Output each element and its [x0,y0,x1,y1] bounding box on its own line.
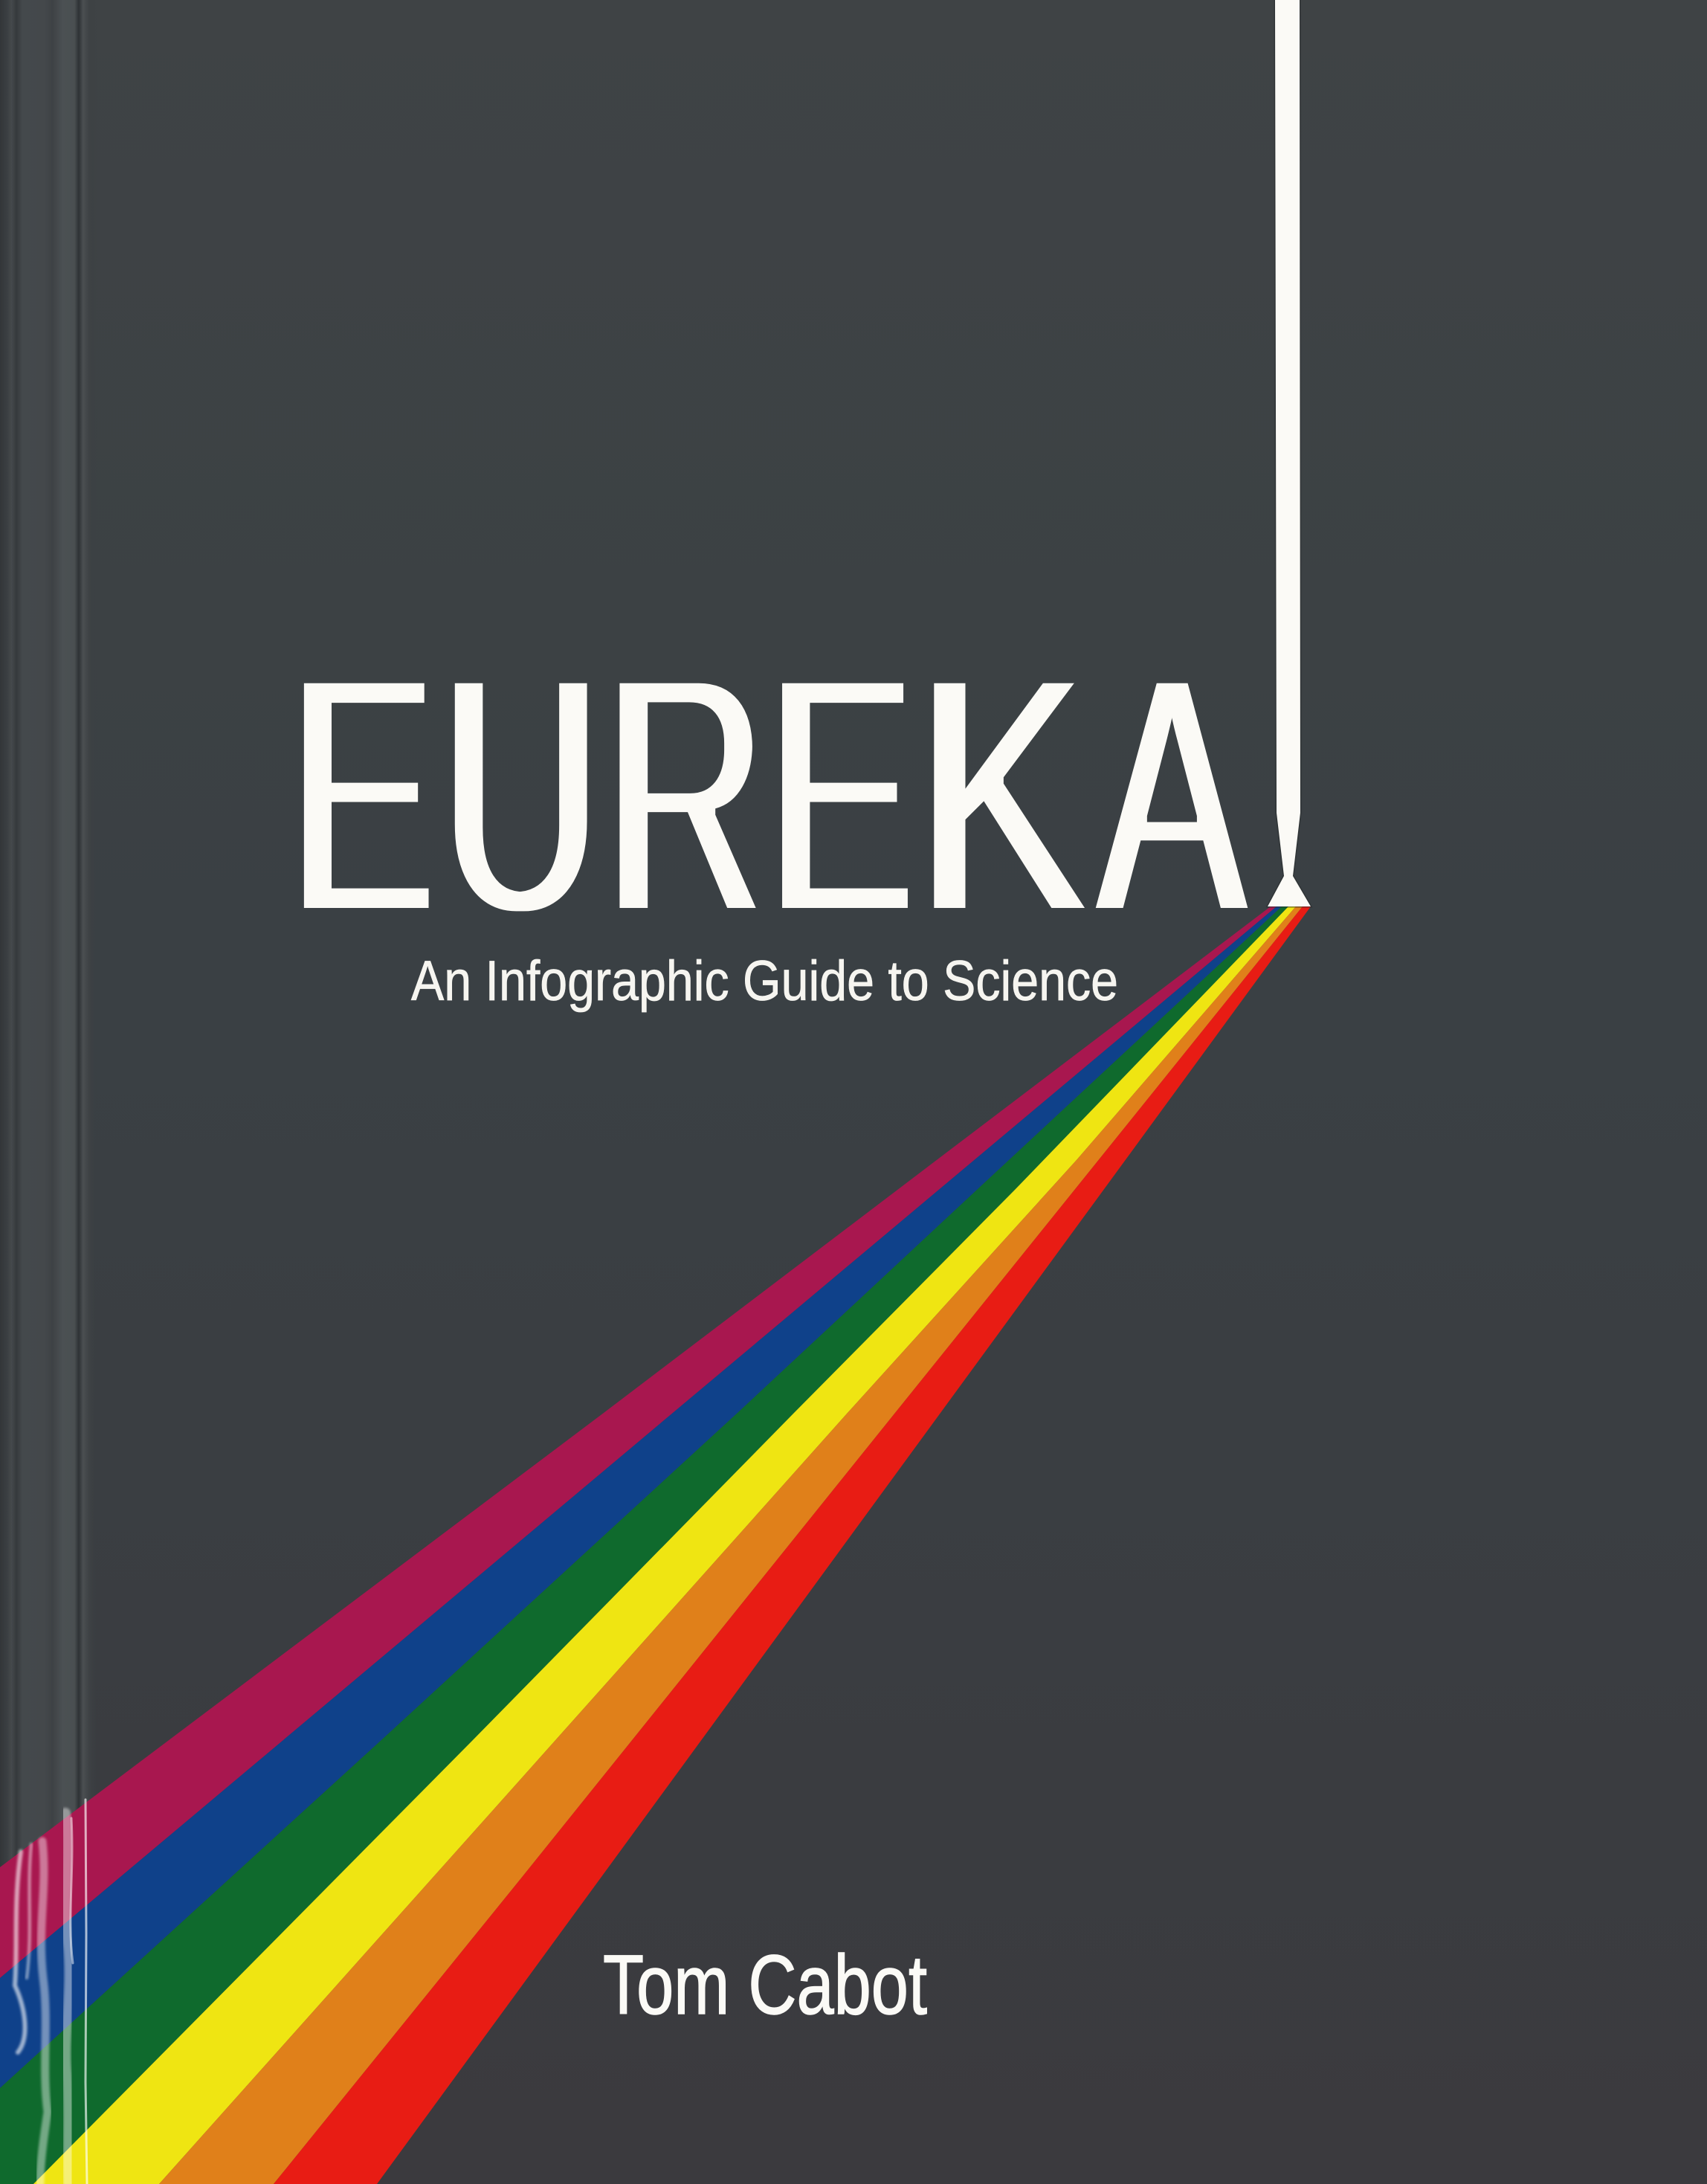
band: yellow [33,906,1296,2184]
title: U [442,608,600,982]
rainbow beam [0,906,1311,2184]
band: green [0,906,1288,2184]
title: R [605,608,765,982]
band: magenta [0,906,1277,1978]
title: E [290,608,434,982]
title [290,608,1248,982]
title: E [768,608,914,982]
band: red [274,906,1311,2184]
band: blue [0,906,1282,2088]
spine [0,0,97,2184]
title: A [1097,608,1246,982]
subtitle: An Infographic Guide to Science [411,950,1118,1013]
spine crease highlights over the rainbow [15,1800,87,2184]
title: K [917,608,1088,982]
author: Tom Cabot [603,1938,927,2032]
light ray narrowing into the prism [1268,0,1311,906]
band: orange [159,906,1303,2184]
